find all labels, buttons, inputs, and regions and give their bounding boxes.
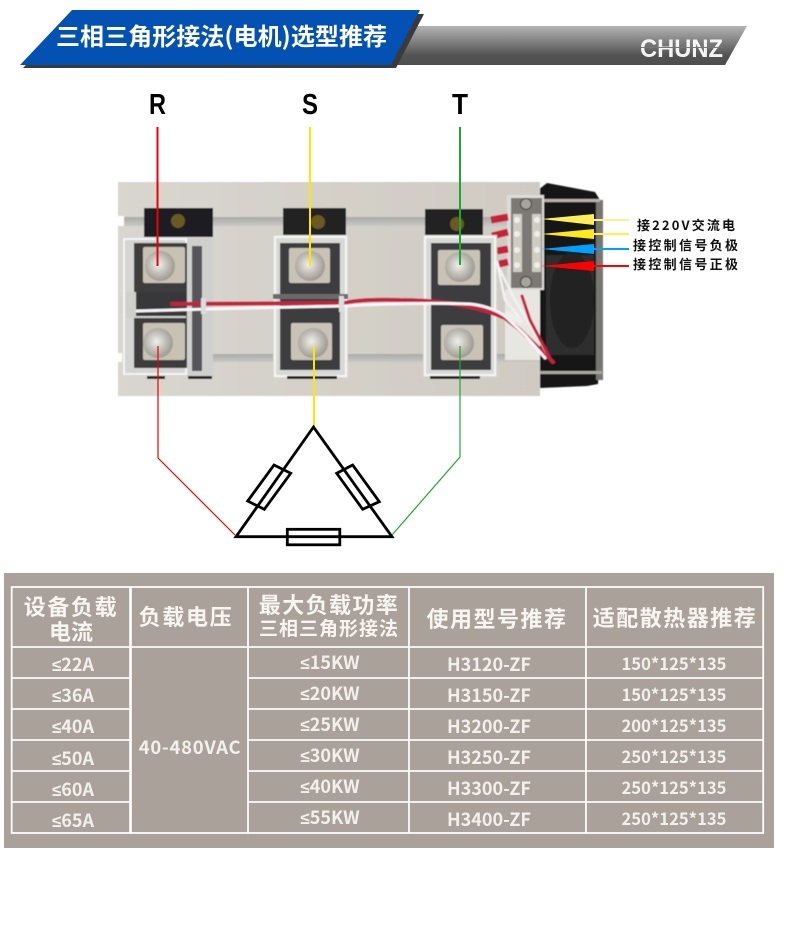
banner shadow xyxy=(23,14,424,68)
column: max load power: ≤30KW xyxy=(300,742,360,768)
callout: control signal negative xyxy=(541,235,738,254)
column: model: H3300-ZF xyxy=(447,775,531,801)
column: model: H3120-ZF xyxy=(447,651,531,677)
column: load current: ≤40A xyxy=(52,713,95,739)
phase labels R S T: S xyxy=(302,89,318,121)
column: max load power: ≤25KW xyxy=(300,711,360,737)
callout: control signal positive xyxy=(541,254,738,273)
wire R lower xyxy=(158,346,235,535)
terminal block xyxy=(491,195,544,290)
column: model: H3400-ZF xyxy=(447,806,531,832)
table header: 三相三角形接法 xyxy=(259,614,399,641)
phase labels R S T: T xyxy=(452,89,468,121)
product photo: solid state relays on heat sink with fan xyxy=(118,182,603,396)
column: max load power: ≤15KW xyxy=(300,649,360,675)
relay module middle xyxy=(273,208,348,379)
column: max load power xyxy=(300,649,360,830)
column: model: H3150-ZF xyxy=(447,682,531,708)
phase labels R S T xyxy=(149,89,468,121)
column: heat sink: 250*125*135 xyxy=(622,806,726,830)
wire S lower xyxy=(313,346,315,427)
column: heat sink xyxy=(622,651,726,830)
column: max load power: ≤20KW xyxy=(300,680,360,706)
heat sink plate xyxy=(118,182,540,396)
column: heat sink: 250*125*135 xyxy=(622,744,726,768)
callouts to terminal block xyxy=(541,214,738,273)
column: load voltage: 40-480VAC xyxy=(139,734,241,760)
column: model: H3250-ZF xyxy=(447,744,531,770)
wire R xyxy=(156,127,158,266)
title: 三相三角形接法(电机)选型推荐 xyxy=(56,17,387,52)
table header: 最大负载功率 xyxy=(259,588,399,620)
column: load current: ≤36A xyxy=(52,682,95,708)
table header xyxy=(24,588,757,647)
relay module left xyxy=(122,208,213,379)
selection table xyxy=(4,573,774,848)
resistor right xyxy=(337,465,379,509)
column: model xyxy=(447,651,531,832)
wire T xyxy=(459,127,461,265)
table header: 设备负载 xyxy=(24,590,118,622)
column: heat sink: 200*125*135 xyxy=(622,713,726,737)
table header: 适配散热器推荐 xyxy=(593,601,757,633)
resistor bottom xyxy=(287,529,340,545)
column: max load power: ≤40KW xyxy=(300,773,360,799)
table background xyxy=(4,573,774,848)
table header: 电流 xyxy=(49,615,93,647)
column: heat sink: 250*125*135 xyxy=(622,775,726,799)
column: load current xyxy=(52,651,95,833)
fan xyxy=(538,183,603,388)
column: heat sink: 150*125*135 xyxy=(622,682,726,706)
callout: control signal negative: 接控制信号负极 xyxy=(633,235,738,254)
blue title banner xyxy=(20,10,420,65)
column: load current: ≤65A xyxy=(52,807,95,833)
wire T lower xyxy=(392,346,460,535)
brand logo: CHUNZ xyxy=(640,35,723,63)
phase labels R S T: R xyxy=(149,89,166,121)
wire S xyxy=(309,127,311,266)
callout: 220V AC pair: 接220V交流电 xyxy=(637,215,735,234)
column: load current: ≤60A xyxy=(52,776,95,802)
phase wires xyxy=(158,127,460,535)
resistor left xyxy=(248,465,291,509)
callout: 220V AC pair xyxy=(541,214,735,239)
table header: 使用型号推荐 xyxy=(426,602,568,634)
table grid xyxy=(12,587,763,833)
column: load current: ≤22A xyxy=(52,651,95,677)
delta connection diagram xyxy=(236,427,392,545)
column: heat sink: 150*125*135 xyxy=(622,651,726,675)
callout: control signal positive: 接控制信号正极 xyxy=(633,254,738,273)
grey banner bar xyxy=(385,26,747,65)
control wiring xyxy=(137,262,553,362)
column: load current: ≤50A xyxy=(52,745,95,771)
relay module right xyxy=(423,209,497,379)
table header: 负载电压 xyxy=(139,600,233,632)
header banner xyxy=(20,10,747,68)
column: model: H3200-ZF xyxy=(447,713,531,739)
column: max load power: ≤55KW xyxy=(300,804,360,830)
